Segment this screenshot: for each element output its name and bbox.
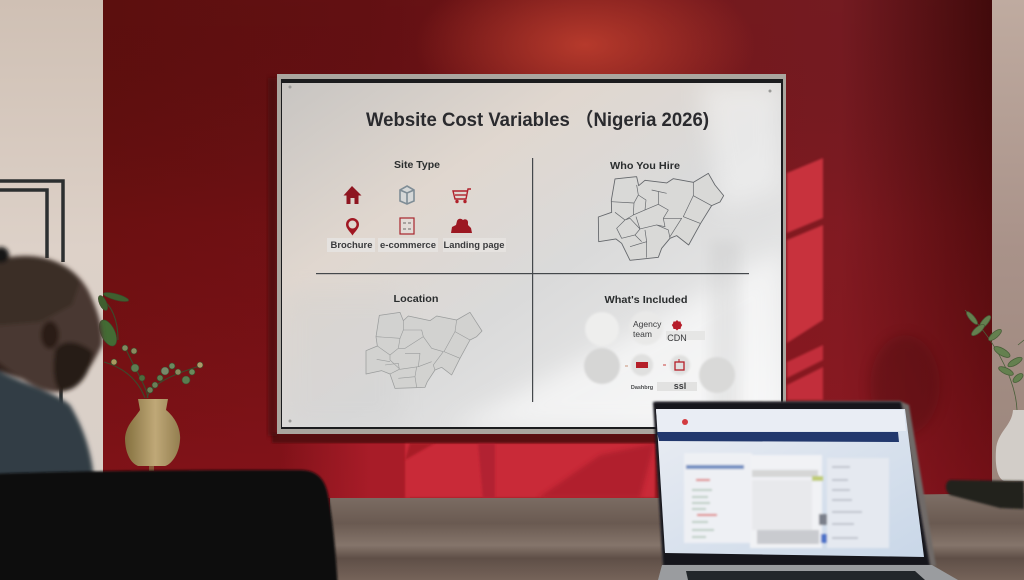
laptop browser top bar bbox=[656, 410, 906, 431]
laptop page content bbox=[684, 453, 889, 548]
map: Nigeria states dark outline bbox=[598, 173, 724, 260]
label: Brochure: Brochure bbox=[330, 240, 372, 250]
board inner edge bbox=[281, 79, 783, 429]
icon: calculator panel bbox=[400, 218, 414, 234]
plant stems and leaves bbox=[96, 291, 203, 398]
shelf: metal frame on left wall bbox=[0, 181, 63, 412]
label: ssl bbox=[657, 381, 697, 391]
laptop bbox=[653, 401, 958, 580]
node: Agency team: team bbox=[633, 329, 652, 339]
label: Brochure bbox=[327, 238, 375, 252]
person neck bbox=[0, 340, 54, 392]
icon: people group bbox=[451, 219, 472, 233]
node: SSL icon bbox=[670, 355, 690, 375]
icon: location pin bbox=[346, 218, 359, 236]
chair back in foreground bbox=[0, 470, 338, 580]
panel: Who You Hire bbox=[598, 160, 724, 260]
person: man seen from behind at left bbox=[0, 247, 102, 480]
arrow: to SSL bbox=[663, 364, 666, 366]
node: blank circle top left bbox=[585, 312, 619, 346]
quadrant divider: vertical bbox=[532, 158, 533, 402]
vase foot bbox=[149, 466, 154, 471]
heading: Site Type: Site Type bbox=[394, 159, 440, 171]
board: framed white presentation board bbox=[277, 74, 786, 434]
person ear bbox=[41, 321, 59, 349]
right vase bbox=[996, 410, 1024, 481]
books on desk bbox=[946, 480, 1024, 509]
desk bbox=[330, 493, 1024, 580]
laptop nav bar bbox=[657, 432, 899, 442]
laptop favicon bbox=[682, 419, 688, 425]
laptop lid bbox=[653, 402, 930, 566]
plant: vase with eucalyptus left bbox=[96, 291, 203, 471]
wall: left cream section bbox=[0, 0, 106, 500]
label: CDN: CDN bbox=[667, 333, 687, 343]
board screws bbox=[288, 86, 772, 422]
laptop screen bbox=[656, 409, 924, 557]
board light streaks bbox=[482, 83, 780, 427]
node: grey circle middle left bbox=[584, 348, 620, 384]
label: ssl: ssl bbox=[674, 381, 686, 391]
wall: red feature wall bbox=[103, 0, 992, 498]
node: grey circle right bbox=[699, 357, 735, 393]
quadrant divider: horizontal bbox=[316, 273, 749, 274]
vase bbox=[125, 399, 180, 466]
icon: CDN gear bbox=[672, 320, 682, 330]
label: e-commerce bbox=[378, 238, 438, 252]
person beard bbox=[54, 342, 93, 391]
node: Dashboard icon bbox=[631, 354, 653, 376]
label: e-commerce: e-commerce bbox=[380, 240, 436, 250]
panel: Site Type bbox=[327, 159, 506, 252]
label: CDN bbox=[666, 331, 705, 343]
person head bbox=[0, 256, 102, 392]
icon: house bbox=[344, 186, 362, 204]
wall: right cream section bbox=[990, 0, 1024, 500]
right plant leaves bbox=[965, 310, 1024, 410]
heading: What's Included: What's Included bbox=[604, 294, 688, 306]
icon: shopping cart bbox=[453, 189, 471, 202]
board face bbox=[282, 83, 781, 427]
panel: Location bbox=[366, 293, 482, 388]
title: Website Cost Variables （Nigeria 2026) bbox=[366, 109, 709, 131]
heading: Who You Hire: Who You Hire bbox=[610, 160, 680, 172]
label: Dashboard: Dashbrg bbox=[631, 385, 653, 391]
laptop keys bbox=[686, 571, 925, 580]
label: Landing page bbox=[443, 238, 506, 252]
node: Agency team bbox=[629, 311, 663, 345]
person hair bun bbox=[0, 247, 9, 263]
person hair bbox=[0, 257, 80, 326]
laptop keyboard base bbox=[658, 565, 958, 580]
icon: box bbox=[400, 186, 414, 204]
laptop lid edge bbox=[655, 401, 936, 566]
node: Agency team: Agency bbox=[633, 319, 662, 329]
map: Nigeria states faint outline bbox=[366, 312, 482, 388]
arrow: to dashboard bbox=[625, 365, 628, 367]
plant: vase and branch right bbox=[946, 310, 1024, 509]
panel: What's Included bbox=[584, 294, 735, 393]
label: Landing page: Landing page bbox=[444, 240, 504, 250]
heading: Location: Location bbox=[394, 293, 438, 305]
person body bbox=[0, 367, 94, 480]
board frame bbox=[277, 74, 786, 434]
